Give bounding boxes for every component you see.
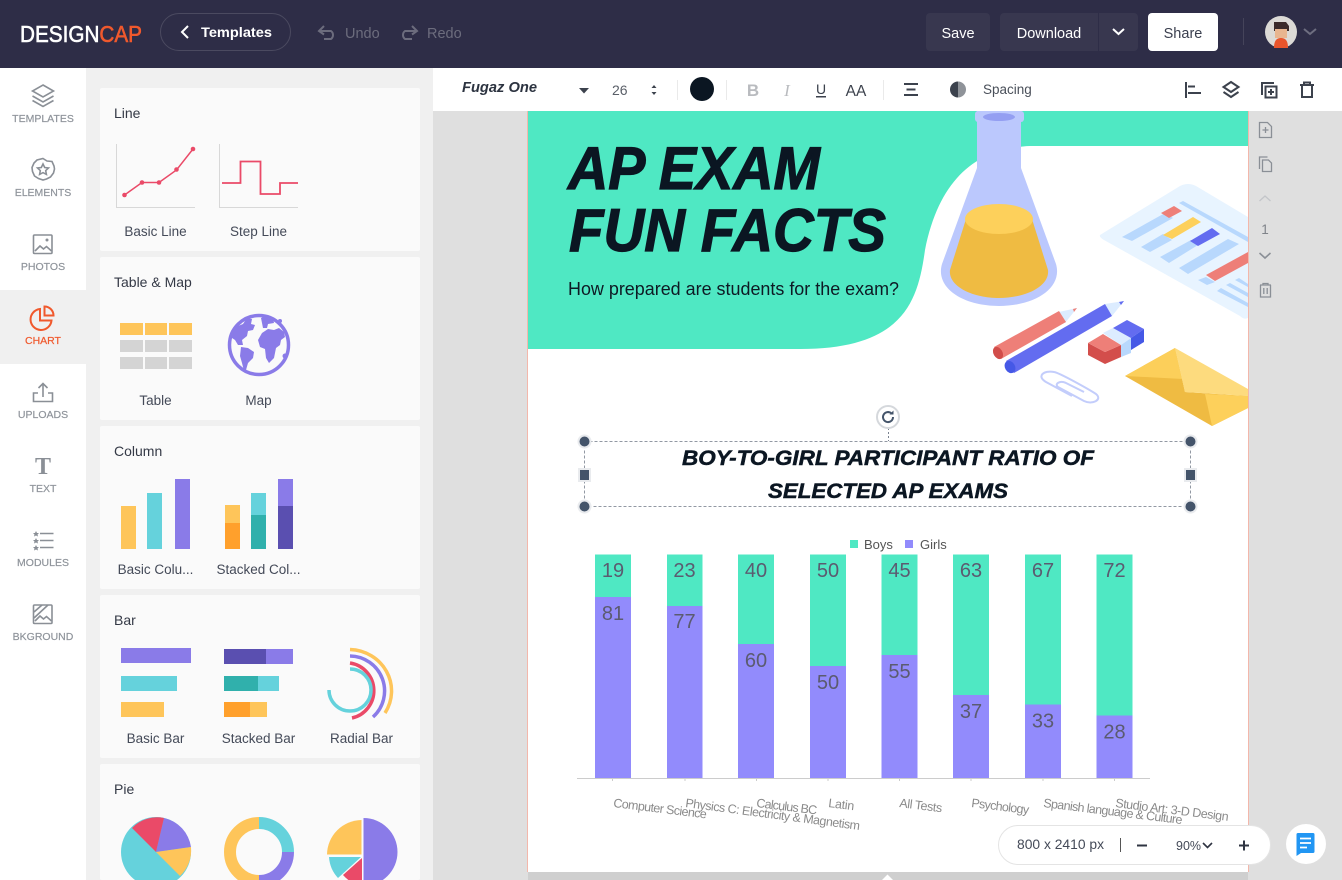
bar: Studio Art: 72 bbox=[1103, 560, 1126, 582]
legend: Boys bbox=[864, 537, 893, 552]
rail item: modules bbox=[17, 531, 69, 569]
text style buttons: I bbox=[783, 81, 791, 100]
card: line bbox=[100, 88, 420, 251]
x axis labels: All Tests bbox=[899, 796, 943, 815]
bar: Calculus BC: 60 bbox=[745, 650, 767, 672]
top navigation bar bbox=[0, 0, 1342, 68]
card: bar: Bar bbox=[114, 612, 136, 628]
table thumbnail: Table bbox=[139, 393, 172, 408]
download button bbox=[1000, 13, 1138, 51]
stacked column chart bbox=[577, 537, 1230, 833]
bar: Latin: 50 bbox=[817, 672, 839, 694]
bar: Psychology: 37 bbox=[960, 701, 982, 723]
bar: Psychology bbox=[953, 554, 989, 778]
rail item: chart (active) bbox=[25, 306, 62, 347]
rail item: modules: MODULES bbox=[17, 557, 69, 569]
text style buttons: U bbox=[816, 81, 826, 97]
stacked bar thumbnail: Stacked Bar bbox=[222, 731, 296, 746]
rail item: photos bbox=[21, 235, 65, 273]
bar: Calculus BC bbox=[738, 554, 774, 778]
templates back button bbox=[160, 14, 290, 50]
illustration: paper clip bbox=[1041, 372, 1098, 402]
redo control bbox=[403, 26, 462, 42]
donut thumbnail bbox=[230, 823, 288, 880]
rail item: chart (active): CHART bbox=[25, 335, 62, 347]
chat button bbox=[1286, 824, 1326, 864]
save button bbox=[926, 13, 990, 51]
rail item: text bbox=[30, 454, 57, 495]
copy page icon bbox=[1260, 157, 1272, 172]
zoom control pill: 800 x 2410 px bbox=[1017, 837, 1104, 852]
download button: Download bbox=[1017, 26, 1081, 42]
step line thumbnail bbox=[220, 144, 298, 239]
basic column thumbnail bbox=[118, 479, 193, 577]
x axis labels: Spanish language & Culture bbox=[1043, 796, 1183, 827]
green header blob bbox=[528, 111, 1248, 349]
user avatar bbox=[1243, 16, 1316, 48]
table thumbnail bbox=[120, 323, 192, 408]
card: table and map bbox=[100, 257, 420, 420]
text formatting toolbar bbox=[433, 68, 1342, 111]
chart heading bbox=[682, 446, 1095, 503]
rail item: templates bbox=[12, 85, 74, 125]
bar: Latin bbox=[810, 554, 846, 778]
rail item: uploads: UPLOADS bbox=[18, 409, 68, 421]
text style buttons: AA bbox=[846, 83, 867, 100]
illustration: pen bbox=[1002, 301, 1124, 375]
undo control bbox=[319, 26, 380, 42]
save button: Save bbox=[941, 26, 975, 42]
transparency icon bbox=[950, 82, 966, 98]
main title bbox=[566, 135, 886, 264]
illustration: flask bbox=[941, 111, 1057, 306]
next page chevron bbox=[1260, 253, 1270, 258]
x axis labels: Studio Art: 3-D Design bbox=[1115, 796, 1230, 824]
add page icon bbox=[1260, 122, 1272, 138]
bar: Computer Science: 19 bbox=[602, 560, 624, 582]
rotate handle bbox=[877, 406, 899, 428]
legend: Girls bbox=[920, 537, 947, 552]
bar: All Tests bbox=[882, 554, 918, 778]
zoom control pill bbox=[998, 826, 1270, 864]
left icon rail bbox=[0, 68, 86, 880]
basic bar thumbnail: Basic Bar bbox=[127, 731, 185, 746]
font size bbox=[612, 82, 656, 98]
x axis labels: Psychology bbox=[971, 796, 1031, 817]
illustration: envelope bbox=[1125, 348, 1248, 426]
share button bbox=[1148, 13, 1218, 51]
rail item: templates: TEMPLATES bbox=[12, 113, 74, 125]
main title: AP EXAM bbox=[566, 135, 822, 202]
chart heading: BOY-TO-GIRL PARTICIPANT RATIO OF bbox=[682, 446, 1095, 470]
pie thumbnail bbox=[121, 817, 191, 880]
bar: Physics C bbox=[667, 554, 702, 778]
illustration: eraser bbox=[1088, 320, 1144, 364]
page side controls bbox=[1260, 122, 1272, 297]
selected text frame bbox=[578, 406, 1196, 512]
rail item: uploads bbox=[18, 384, 68, 421]
text style buttons bbox=[677, 80, 884, 100]
text style buttons: B bbox=[747, 81, 759, 100]
basic line thumbnail bbox=[116, 144, 195, 239]
delete page icon bbox=[1260, 284, 1271, 297]
x axis labels bbox=[613, 796, 1230, 833]
illustration: pencil bbox=[991, 308, 1077, 361]
x axis labels: Calculus BC bbox=[756, 796, 818, 817]
delete icon bbox=[1300, 82, 1314, 97]
rail item: background: BKGROUND bbox=[13, 631, 74, 643]
rail item: elements bbox=[15, 158, 71, 199]
radial bar thumbnail bbox=[329, 650, 394, 746]
legend bbox=[850, 537, 947, 552]
share button: Share bbox=[1164, 26, 1202, 42]
bar: All Tests: 45 bbox=[888, 560, 911, 582]
bar: Calculus BC: 40 bbox=[745, 560, 767, 582]
text colour swatch bbox=[690, 77, 714, 101]
redo control: Redo bbox=[427, 26, 462, 42]
bar: Physics C: 23 bbox=[673, 560, 696, 582]
card: column bbox=[100, 426, 420, 589]
font size: 26 bbox=[612, 82, 628, 98]
chart picker panel bbox=[86, 68, 433, 880]
canvas workspace background bbox=[433, 111, 1342, 880]
card: table and map: Table & Map bbox=[114, 274, 192, 290]
rail item: text: T bbox=[35, 454, 51, 480]
logo: DESIGNCAP bbox=[20, 21, 142, 47]
templates back button: Templates bbox=[201, 24, 272, 40]
previous page chevron bbox=[1260, 196, 1270, 201]
x axis labels: Computer Science bbox=[613, 796, 708, 821]
font selector bbox=[462, 80, 589, 96]
radial bar thumbnail: Radial Bar bbox=[330, 731, 394, 746]
card: column: Column bbox=[114, 443, 162, 459]
bar: Psychology: 63 bbox=[960, 560, 982, 582]
page number: 1 bbox=[1261, 222, 1269, 237]
x axis labels: Physics C: Electricity & Magnetism bbox=[685, 796, 861, 833]
card: bar bbox=[100, 595, 420, 758]
card: pie bbox=[100, 764, 420, 880]
font selector: Fugaz One bbox=[462, 80, 537, 96]
design page bbox=[527, 111, 1249, 872]
rail item: elements: ELEMENTS bbox=[15, 187, 71, 199]
undo control: Undo bbox=[345, 26, 380, 42]
card: pie: Pie bbox=[114, 781, 134, 797]
rail item: background bbox=[13, 605, 74, 643]
basic column thumbnail: Basic Colu... bbox=[118, 562, 193, 577]
card: line: Line bbox=[114, 105, 141, 121]
alignment icon bbox=[904, 84, 918, 95]
bar: All Tests: 55 bbox=[888, 661, 911, 683]
chart heading: SELECTED AP EXAMS bbox=[768, 479, 1009, 503]
bar: Latin: 50 bbox=[817, 560, 839, 582]
bar: Spanish: 33 bbox=[1032, 710, 1054, 732]
spacing label: Spacing bbox=[983, 82, 1032, 97]
main title: FUN FACTS bbox=[569, 197, 886, 264]
step line thumbnail: Step Line bbox=[230, 224, 287, 239]
bar: Spanish bbox=[1025, 554, 1061, 778]
bar: Computer Science: 81 bbox=[602, 603, 624, 625]
bar: Studio Art: 28 bbox=[1103, 722, 1126, 744]
x axis labels: Latin bbox=[828, 796, 855, 813]
basic bar thumbnail bbox=[121, 648, 191, 746]
zoom control pill: 90% bbox=[1176, 839, 1201, 853]
rail item: photos: PHOTOS bbox=[21, 261, 65, 273]
x axis bbox=[577, 778, 1150, 781]
map globe thumbnail bbox=[230, 316, 288, 408]
bar: Computer Science bbox=[595, 554, 631, 778]
next page strip bbox=[528, 872, 1248, 880]
rail item: text: TEXT bbox=[30, 483, 57, 495]
stacked column thumbnail: Stacked Col... bbox=[216, 562, 301, 577]
stacked column thumbnail bbox=[216, 479, 301, 577]
bar: Studio Art bbox=[1096, 554, 1132, 778]
layers icon bbox=[1224, 82, 1238, 97]
subtitle: How prepared are students for the exam? bbox=[568, 278, 899, 299]
stacked bar thumbnail bbox=[222, 649, 296, 746]
map globe thumbnail: Map bbox=[245, 393, 272, 408]
bar: Physics C: 77 bbox=[673, 611, 696, 633]
basic line thumbnail: Basic Line bbox=[124, 224, 187, 239]
duplicate icon bbox=[1262, 83, 1276, 98]
exploded pie thumbnail bbox=[327, 818, 398, 880]
align icon bbox=[1186, 82, 1201, 98]
illustration: document bbox=[1100, 184, 1248, 319]
bar: Spanish: 67 bbox=[1032, 560, 1054, 582]
